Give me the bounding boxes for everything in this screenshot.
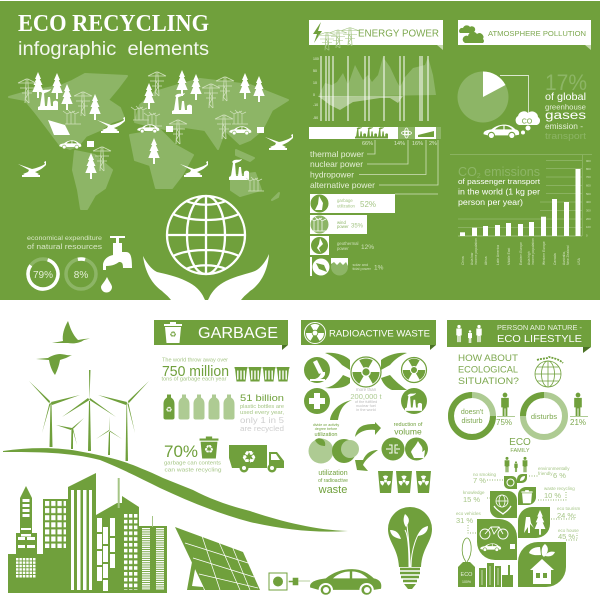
icon: medical cross <box>304 388 330 414</box>
illustration: wind turbines on hill <box>3 370 348 532</box>
bar: geothermal power <box>310 236 374 255</box>
CO2 heading and description: of passenger transport <box>458 177 541 186</box>
bar: solar and tidal power: tidal power <box>352 267 372 271</box>
bar percentages <box>362 141 437 147</box>
illustration: city skyline <box>8 473 167 593</box>
bar chart: 400 <box>586 200 591 204</box>
callout: percentages: waste recycling <box>544 486 575 491</box>
callout: percentages: no smoking <box>473 472 497 477</box>
icon row: trash cans <box>234 367 290 382</box>
bar: garbage utilization <box>310 194 395 213</box>
bar chart: income population <box>474 238 478 265</box>
callout leader dots <box>468 476 577 540</box>
illustration: eco light bulb <box>388 507 432 589</box>
eco family label <box>509 437 531 454</box>
stat: 17% of greenhouse gases <box>545 70 587 141</box>
text: utilization <box>313 423 339 438</box>
bar: geothermal power: power <box>337 246 349 251</box>
text: reduction of volume: volume <box>394 426 422 436</box>
text: utilization: utilization <box>315 432 337 438</box>
question text: SITUATION? <box>458 376 519 386</box>
stat: 70% <box>164 436 222 474</box>
connector lines <box>359 140 438 194</box>
header: garbage: GARBAGE <box>198 325 278 342</box>
panel: radioactive waste <box>301 320 436 496</box>
map icon: solar panel <box>48 120 70 135</box>
area chart: 0 <box>313 93 315 97</box>
header: energy power <box>309 20 443 50</box>
area chart: -10 <box>313 103 318 107</box>
bar chart: Canada <box>553 253 557 265</box>
map icons: pylons <box>18 72 234 171</box>
stacked energy bar <box>309 127 441 139</box>
callout: percentages: friendly <box>538 471 553 476</box>
stat: 17% of greenhouse gases: emission - <box>545 122 583 131</box>
ring: 79%: 79% <box>33 270 53 281</box>
stat: 17% of greenhouse gases: 17% <box>545 70 587 95</box>
bar: garbage utilization: 52% <box>360 200 376 209</box>
panel: eco lifestyle <box>447 320 591 587</box>
CO2 heading and description <box>458 164 541 207</box>
stat: 70%: 70% <box>164 442 198 461</box>
bar chart: 800 <box>586 167 591 171</box>
ring: 79% <box>24 255 62 293</box>
text: utilization of radioactive waste: waste <box>318 484 347 496</box>
bar percentages: 16% <box>412 141 423 147</box>
text: utilization of radioactive waste <box>318 470 348 496</box>
header: atmosphere pollution <box>458 20 591 50</box>
flow arrows <box>325 353 407 471</box>
text: utilization: divide on activity <box>313 423 339 427</box>
ring: 8% <box>66 258 96 289</box>
stat: 750 million: 750 million <box>162 363 229 380</box>
icon: faucet <box>101 236 132 292</box>
stat: 17% of greenhouse gases: greenhouse <box>545 102 586 112</box>
ring: 8%: 8% <box>74 270 88 281</box>
header: garbage: ♻ <box>169 330 177 339</box>
power type labels <box>310 149 375 190</box>
figure: 75% <box>496 393 515 427</box>
icon: central radiation symbol <box>351 357 381 387</box>
illustration: electric car and plug <box>269 569 381 595</box>
question text <box>458 353 519 386</box>
bar: solar and tidal power: 1% <box>374 264 384 272</box>
area chart <box>313 56 436 121</box>
bar chart: 900 <box>586 159 591 163</box>
callout: percentages: 15 % <box>463 495 480 504</box>
title: ECO RECYCLING <box>18 11 209 37</box>
donut: disturbs 21% <box>523 395 565 437</box>
bar chart: Western Europe <box>542 241 546 265</box>
icon: globe <box>167 196 245 274</box>
bar: wind power: power <box>337 224 349 229</box>
stat: 17% of greenhouse gases: of global <box>545 92 586 103</box>
callout: percentages: knowledge <box>463 490 485 495</box>
bar percentages: 2% <box>429 141 437 147</box>
header: energy power: ENERGY POWER <box>358 28 439 40</box>
header: eco lifestyle <box>447 320 591 353</box>
figure: 75%: 75% <box>496 418 512 427</box>
resource label: of natural resources <box>27 242 102 251</box>
stat: 17% of greenhouse gases: gases <box>545 110 586 122</box>
power type labels: thermal power <box>310 149 364 159</box>
bar: solar and tidal power: solar and <box>352 263 368 267</box>
bar chart: Middle East <box>507 248 511 265</box>
text: 200,000 t: more than <box>356 387 377 392</box>
illustration: solar panel <box>175 527 260 590</box>
circles: before utilization <box>308 438 359 464</box>
icon: CO cloud and car: CO <box>522 118 533 126</box>
callout: percentages: 45 % <box>558 532 575 541</box>
donut: doesn't disturb 75%: disturb <box>461 418 483 425</box>
CO2 heading and description: in the world (1 kg per <box>458 188 540 196</box>
text: 200,000 t: in the world <box>356 408 376 412</box>
panel: garbage <box>154 320 290 474</box>
bar: solar and tidal power <box>310 257 384 276</box>
stat: 750 million: tons of garbage each year <box>162 377 227 383</box>
eco family label: ECO <box>509 437 531 448</box>
panel: eco recycling world map <box>0 1 300 300</box>
power type labels: alternative power <box>310 180 375 190</box>
icon: factory circle <box>401 388 427 414</box>
icon: recycling truck: ♻ <box>241 448 257 468</box>
bar chart: 100 <box>586 225 591 229</box>
text: 200,000 t: of the fulfilled <box>355 400 377 404</box>
bar chart: income population <box>531 238 535 265</box>
stat: 17% of greenhouse gases: transport <box>545 131 586 141</box>
bar chart: Latin America <box>496 245 500 265</box>
icon: microscope <box>304 357 330 383</box>
bar chart: Eastern Europe <box>519 242 523 265</box>
bar: wind power <box>310 215 367 234</box>
bar: garbage utilization: garbage <box>337 198 353 203</box>
illustration: birds <box>36 321 90 375</box>
power type labels: nuclear power <box>310 159 363 169</box>
text: 200,000 t: nuclear fuel <box>356 404 376 408</box>
icon row: plastic bottles <box>164 394 234 420</box>
header: eco lifestyle: PERSON AND NATURE - <box>497 325 583 332</box>
stat: 750 million: The world throw away over <box>162 358 228 364</box>
area chart: 10 <box>313 81 317 85</box>
text: utilization of radioactive waste: of radioactive <box>318 478 348 484</box>
map icons: tidal generators <box>18 117 293 177</box>
callout: percentages: 24 % <box>557 511 574 520</box>
donut: doesn't disturb 75% <box>451 395 493 437</box>
panel: atmosphere pollution <box>450 1 600 300</box>
stat: 51 billion: only 1 in 5 <box>240 415 284 425</box>
bar chart: 700 <box>586 175 591 179</box>
CO2 heading and description: emissions <box>481 164 540 179</box>
pie chart <box>458 72 508 122</box>
icons: radioactive bins <box>378 471 431 493</box>
header: radioactive waste: RADIOACTIVE WASTE <box>329 328 430 340</box>
bar: geothermal power: 12% <box>361 244 374 251</box>
header: radioactive waste <box>301 320 436 350</box>
figure: 21%: 21% <box>570 418 586 427</box>
icon: recycling truck <box>229 445 284 472</box>
icon: radiation outline <box>401 358 427 382</box>
callout: percentages: 7 % <box>473 476 486 485</box>
bar: garbage utilization: utilization <box>337 204 356 208</box>
map icons: turbines <box>63 106 264 191</box>
bar: wind power: 35% <box>351 224 364 230</box>
text: utilization: degree before <box>315 427 337 431</box>
resource label <box>27 235 102 251</box>
text: utilization of radioactive waste: utilization <box>318 470 348 477</box>
area chart: 50 <box>313 69 317 73</box>
callout: percentages: eco house <box>558 528 579 533</box>
eco family label: FAMILY <box>510 448 530 454</box>
question text: HOW ABOUT <box>458 353 518 364</box>
icons: volume reduction <box>382 438 428 460</box>
area chart: 100 <box>313 57 319 61</box>
bar chart: 300 <box>586 208 591 212</box>
icon: CO cloud and car <box>484 111 540 138</box>
map icons: trees <box>32 70 265 179</box>
subtitle: infographic elements <box>18 39 209 60</box>
figure: 21% <box>570 393 588 427</box>
stat: 51 billion: used every year, <box>240 410 285 416</box>
bar chart: New Zealand <box>566 245 570 265</box>
bar chart: 200 <box>586 217 591 221</box>
bar chart: China <box>461 256 465 265</box>
bar chart <box>450 154 592 265</box>
connector arrow <box>500 76 528 113</box>
bar chart: Asia low <box>470 252 474 265</box>
bar chart: Asia high <box>527 251 531 265</box>
question text: ECOLOGICAL <box>458 364 518 374</box>
eco tree leaves <box>477 474 566 587</box>
callout: percentages: environmentally <box>538 466 570 471</box>
donut: disturbs 21%: disturbs <box>531 412 557 421</box>
CO2 heading and description: person per year) <box>458 198 523 207</box>
area chart: -50 <box>313 116 318 120</box>
header: atmosphere pollution: ATMOSPHERE POLLUTION <box>488 29 586 38</box>
panel: energy power <box>300 1 450 300</box>
bar chart: Africa <box>484 256 488 265</box>
icon: family <box>505 457 527 472</box>
stat: 51 billion: plastic bottles are <box>240 404 284 410</box>
donut: doesn't disturb 75%: doesn't <box>461 409 483 416</box>
callout: percentages: eco vehicles <box>456 511 482 516</box>
bar chart: 0 <box>586 234 588 238</box>
callout: percentages: eco tourism <box>557 506 581 511</box>
text: 200,000 t <box>350 387 383 412</box>
CO2 heading and description: 2 <box>477 173 481 180</box>
icon: eco tag: ECO <box>461 572 473 578</box>
callout: percentages: 31 % <box>456 516 473 525</box>
bar: geothermal power: geothermal <box>337 241 359 246</box>
bar: wind power: wind <box>337 220 346 225</box>
stat: 51 billion: 51 billion <box>240 393 284 404</box>
bar chart: USA <box>577 257 581 265</box>
text: reduction of volume: reduction of <box>394 422 423 428</box>
icon: mini city <box>479 563 513 587</box>
header: garbage <box>154 320 288 350</box>
stat: 51 billion: are recycled <box>240 424 284 433</box>
stat: 70%: garbage can contents <box>164 460 221 466</box>
stat: 70%: ♻ <box>204 443 214 456</box>
map icons: electric cars <box>59 124 264 149</box>
text: 200,000 t: 200,000 t <box>350 392 383 401</box>
icon: small globe <box>535 357 563 387</box>
bar percentages: 14% <box>394 141 405 147</box>
world map <box>9 74 288 209</box>
callout: percentages <box>456 466 581 541</box>
bar percentages: 66% <box>362 141 373 147</box>
stat: 750 million <box>162 358 229 383</box>
icon: hands <box>143 254 269 300</box>
callout: percentages: 10 % <box>544 491 561 500</box>
stat: 51 billion <box>240 393 285 433</box>
icon: eco tag: 100% <box>462 580 471 584</box>
bar chart: 500 <box>586 192 591 196</box>
stat: 70%: can waste recycling <box>164 468 222 474</box>
text: reduction of volume <box>394 422 423 436</box>
power type labels: hydropower <box>310 170 354 180</box>
callout: percentages: 6 % <box>553 471 566 480</box>
icon: eco tag <box>458 538 475 587</box>
resource label: economical expenditure <box>27 235 102 242</box>
map icons: factories <box>38 89 249 180</box>
CO2 heading and description: CO <box>458 164 478 179</box>
bar chart: 600 <box>586 184 591 188</box>
header: eco lifestyle: ECO LIFESTYLE <box>497 333 582 345</box>
icon row: plastic bottles: ♻ <box>166 405 172 414</box>
bar chart: Australia, <box>562 251 566 265</box>
